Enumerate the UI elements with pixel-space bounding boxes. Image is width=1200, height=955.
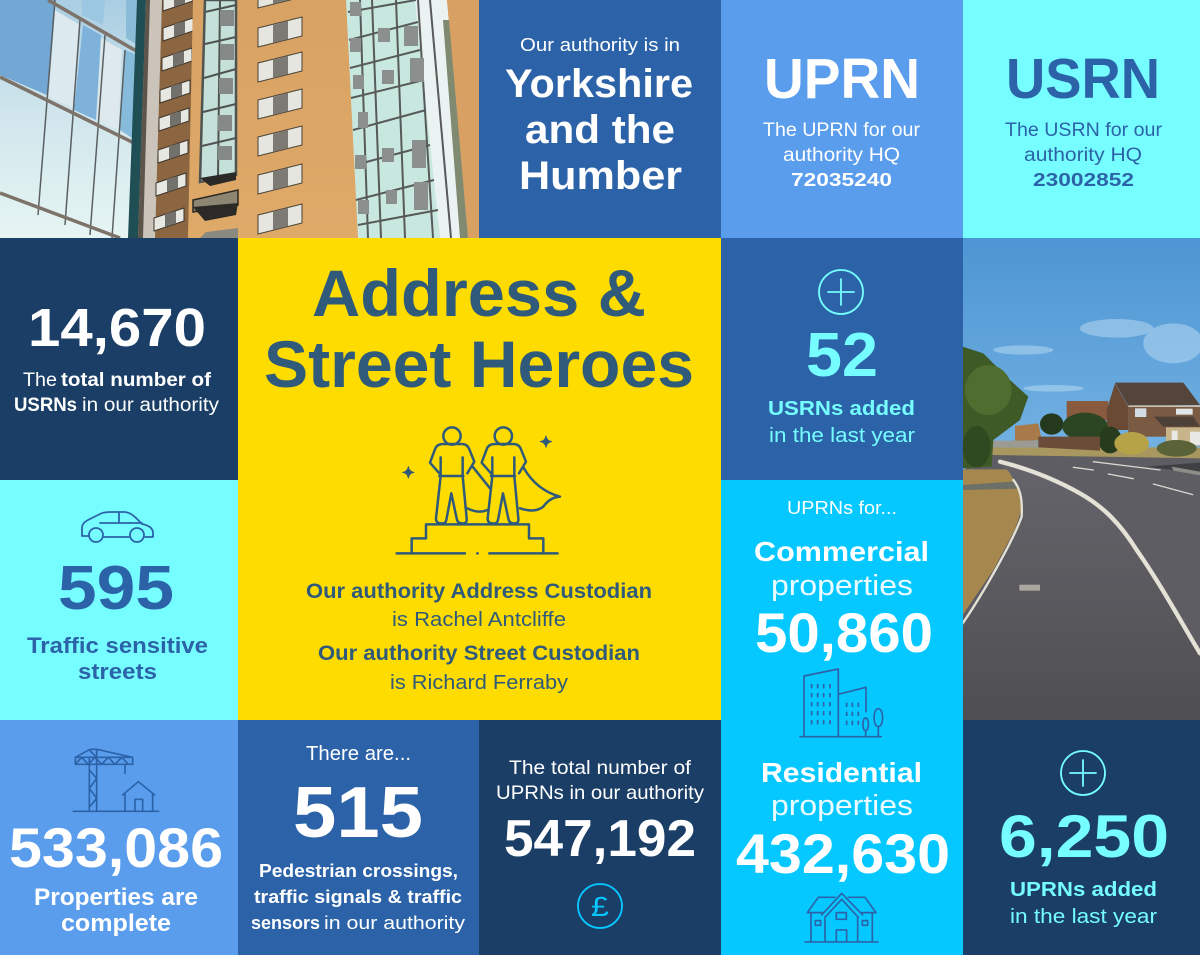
UPRN text [763,120,921,190]
traffic sensitive caption: Traffic sensitive [27,633,208,658]
UPRNs added caption [1010,878,1157,928]
UPRN heading: UPRN [764,47,920,111]
total USRNs caption: USRNs [14,395,77,416]
residential label: Residential [761,757,922,788]
region name: and the [525,108,675,152]
icon: office buildings [800,669,883,737]
USRNs added caption: USRNs added [768,397,915,420]
UPRN text: 72035240 [791,169,892,190]
panel: building photo [0,0,479,238]
commercial label [754,536,929,602]
region name: Humber [519,154,682,198]
traffic sensitive caption [27,633,208,684]
panel: UPRN [721,0,963,238]
region name [505,62,693,198]
commercial number: 50,860 [755,601,933,664]
region intro text: Our authority is in [520,34,680,55]
UPRNs for label: UPRNs for... [787,498,897,518]
crossings caption: sensors [251,913,320,933]
residential label [761,757,922,822]
crossings caption [251,861,465,933]
panel: USRN [963,0,1200,238]
region name: Yorkshire [505,62,693,106]
custodians text: is Rachel Antcliffe [392,609,566,631]
UPRNs added caption: in the last year [1010,905,1157,928]
residential number: 432,630 [736,822,950,885]
total USRNs caption: total number of [61,370,212,391]
USRN text: 23002852 [1033,169,1134,190]
total USRNs caption: The [23,370,57,391]
icon: two heroes on podium [397,427,560,553]
title: Address & [312,256,646,330]
panel: title and custodians [238,238,721,720]
residential label: properties [771,790,913,822]
USRNs added caption [768,397,915,447]
title [264,256,694,401]
icon: pound circle: £ [591,891,609,922]
icon: crane and house [73,749,159,811]
properties complete caption: Properties are [34,884,198,911]
custodians text [306,580,652,694]
total UPRNs caption: UPRNs in our authority [496,782,704,804]
panel: UPRNs added [963,720,1200,955]
USRN text [1005,120,1163,190]
crossings caption: in our authority [324,913,465,933]
commercial label: properties [771,570,913,602]
tree [963,347,1028,468]
total UPRNs caption [496,757,704,804]
USRNs added number: 52 [806,321,878,390]
total UPRNs number: 547,192 [504,810,696,868]
panel: region [479,0,721,238]
panel: total USRNs [0,238,238,480]
crossings number: 515 [293,773,423,853]
icon: pound circle [578,884,622,928]
icon: plus circle [819,270,863,314]
properties complete number: 533,086 [9,816,223,879]
custodians text: Our authority Address Custodian [306,580,652,603]
there are label: There are... [306,743,411,765]
UPRN text: authority HQ [783,145,900,166]
UPRNs added number: 6,250 [999,803,1169,870]
panel: USRNs added [721,238,963,480]
icon: plus circle [1061,751,1105,795]
icon: house [805,893,878,942]
crossings caption: Pedestrian crossings, [259,861,458,881]
panel: traffic sensitive streets [0,480,238,720]
traffic sensitive number: 595 [58,554,174,623]
commercial label: Commercial [754,536,929,567]
panel: crossings and signals [238,720,479,955]
panel: UPRNs by property type [721,480,963,955]
UPRN text: The UPRN for our [763,120,921,141]
crossings caption: traffic signals & traffic [254,887,462,907]
panel: total UPRNs [479,720,721,955]
USRN text: The USRN for our [1005,120,1163,141]
icon: car [82,512,153,542]
custodians text: is Richard Ferraby [390,672,568,694]
properties complete caption [34,884,198,937]
panel: properties complete [0,720,238,955]
panel: road photo [963,238,1200,720]
total USRNs caption: in our authority [82,395,220,416]
traffic sensitive caption: streets [78,659,157,684]
UPRNs added caption: UPRNs added [1010,878,1157,901]
total UPRNs caption: The total number of [509,757,692,779]
total USRNs number: 14,670 [28,298,206,358]
properties complete caption: complete [61,910,171,937]
USRN heading: USRN [1006,47,1160,111]
USRN text: authority HQ [1024,145,1142,166]
USRNs added caption: in the last year [769,424,915,447]
road surface [963,455,1200,649]
title: Street Heroes [264,327,694,401]
custodians text: Our authority Street Custodian [318,642,640,665]
total USRNs caption [14,370,220,416]
